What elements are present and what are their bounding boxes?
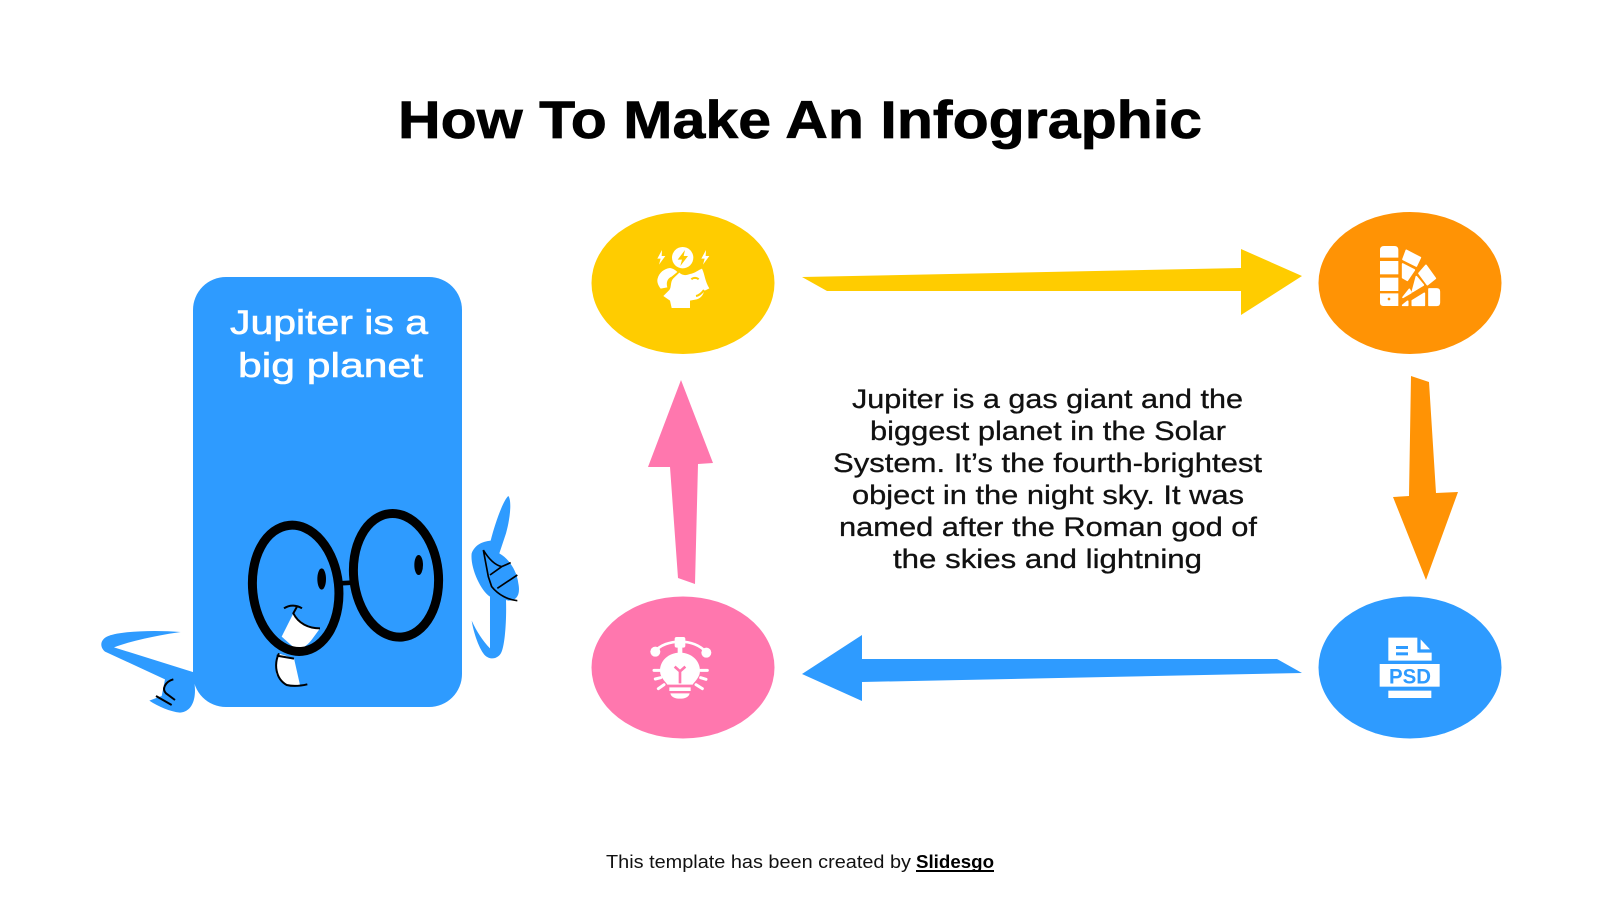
right hand pointing up: [471, 496, 519, 658]
node: blue circle with PSD icon: [1318, 596, 1502, 738]
arrow: yellow, pointing right: [802, 249, 1302, 315]
central description text: the skies and lightning: [893, 544, 1202, 574]
node: yellow circle with mind icon: [592, 212, 774, 354]
node: orange circle with palette icon: [1318, 212, 1502, 354]
card body: [193, 277, 462, 707]
icon: head with lightning: [657, 247, 709, 308]
arrow: blue, pointing left: [802, 635, 1302, 701]
central description text: named after the Roman god of: [839, 512, 1258, 542]
central description text: [833, 384, 1263, 574]
card heading: [230, 304, 428, 385]
arrow: orange, pointing down: [1393, 376, 1458, 580]
central description text: biggest planet in the Solar: [870, 416, 1226, 446]
footer credit: This template has been created by: [606, 852, 911, 872]
character: blue card with glasses and hands: [101, 277, 519, 713]
icon: colour swatch fan: [1380, 246, 1439, 306]
face: mouth, glasses, eyes: [246, 509, 445, 686]
central description text: System. It’s the fourth-brightest: [833, 448, 1263, 478]
node: pink circle with bulb icon: [592, 596, 774, 738]
icon: PSD file: [1380, 638, 1440, 698]
footer credit: Slidesgo: [916, 852, 994, 872]
arrow: pink, pointing up: [648, 380, 713, 584]
title: How To Make An Infographic: [398, 91, 1202, 150]
card heading: big planet: [238, 347, 424, 385]
icon: light bulb with vector handles: [650, 637, 711, 699]
central description text: object in the night sky. It was: [852, 480, 1244, 510]
central description text: Jupiter is a gas giant and the: [852, 384, 1243, 414]
card heading: Jupiter is a: [230, 304, 428, 342]
left hand pointing down: [101, 631, 195, 713]
icon: PSD file: PSD: [1389, 665, 1431, 689]
